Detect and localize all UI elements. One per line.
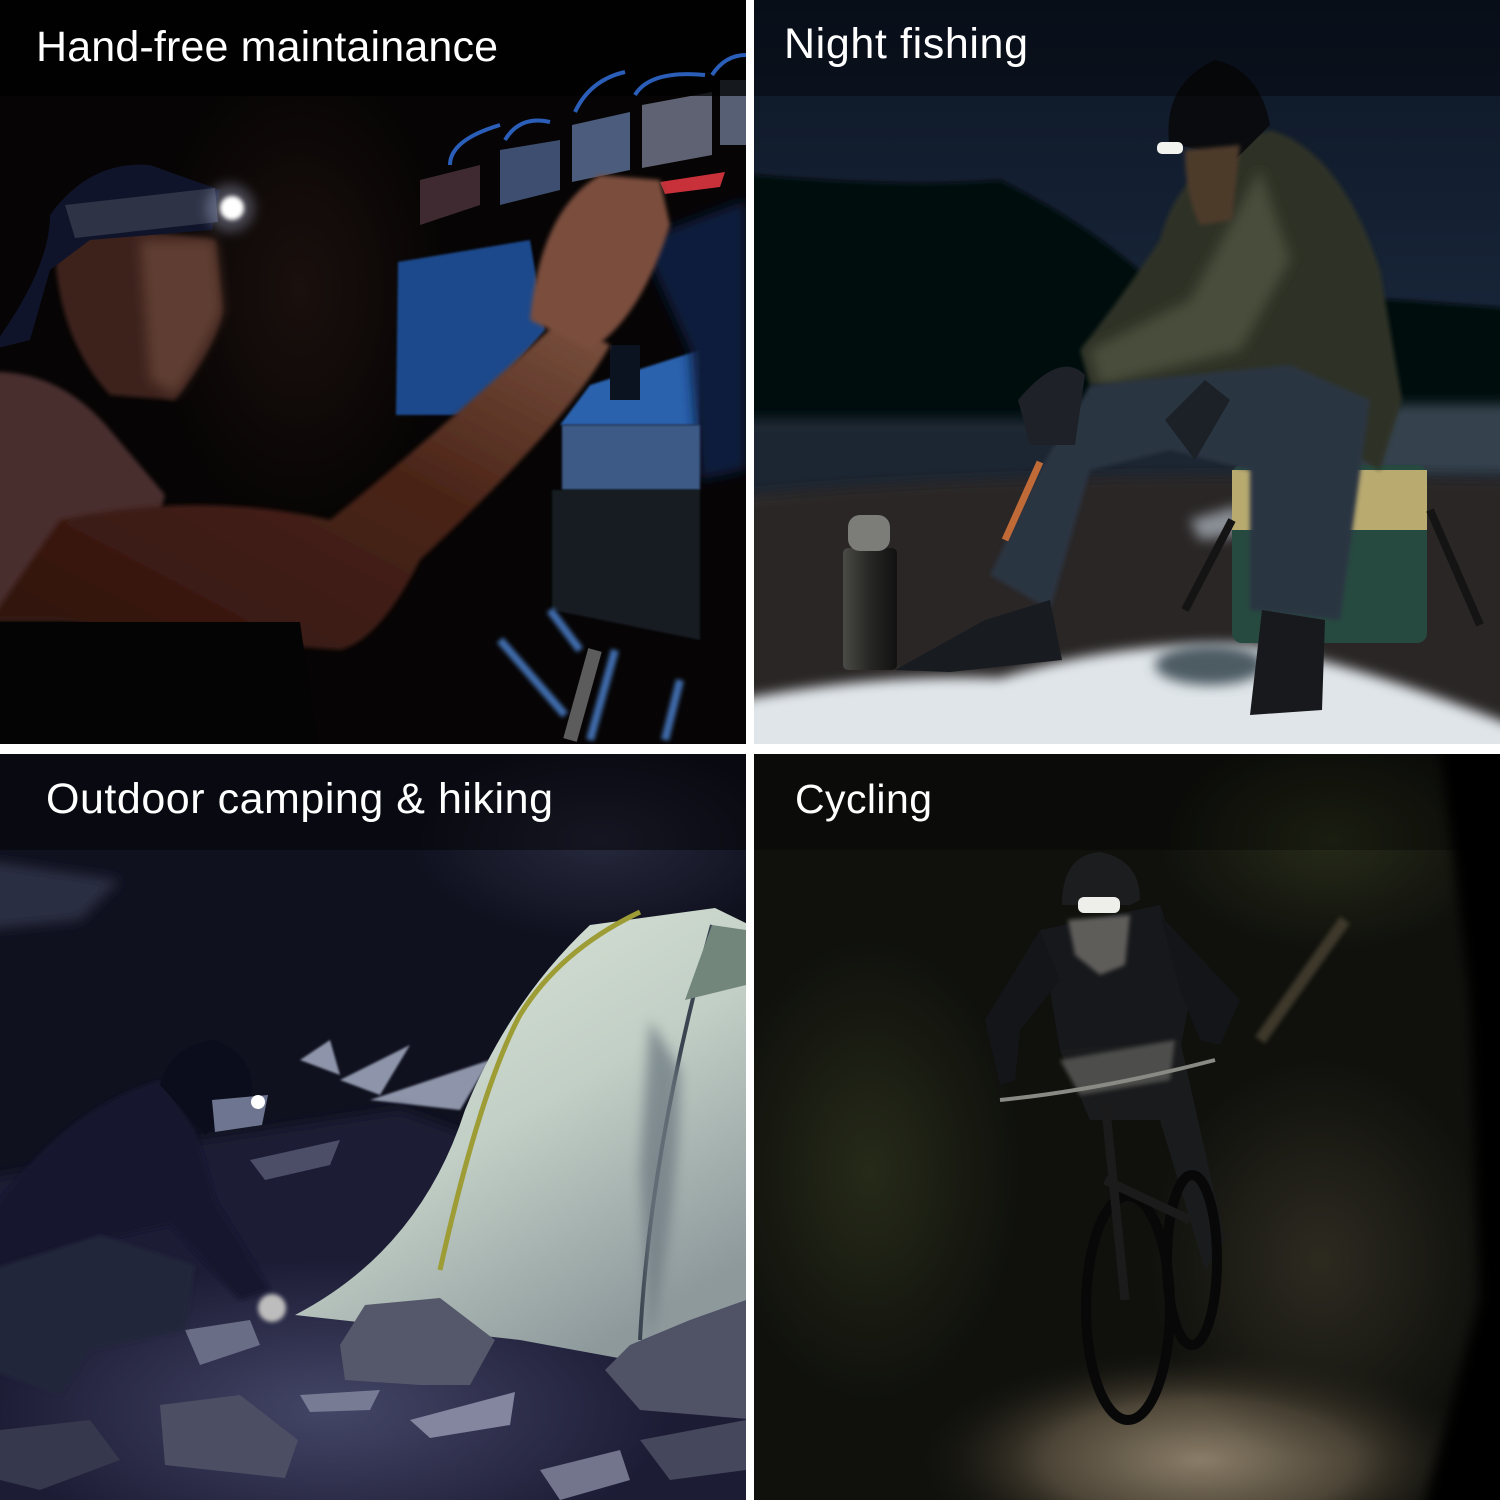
panel: hand-free maintenance xyxy=(0,0,746,760)
header bar xyxy=(0,754,746,850)
panel: night fishing xyxy=(754,0,1500,744)
cyclist xyxy=(985,852,1240,1420)
heading: Hand-free maintainance xyxy=(36,23,498,71)
heading: Night fishing xyxy=(784,20,1028,68)
wires xyxy=(450,55,746,165)
tent xyxy=(295,908,760,1362)
header bar xyxy=(1222,770,1438,850)
tree trunk right xyxy=(1420,740,1500,1500)
hiker xyxy=(0,1081,289,1380)
fisher xyxy=(895,60,1402,715)
thermos xyxy=(843,515,897,670)
header bar xyxy=(754,0,1500,96)
cooler seat xyxy=(1185,465,1480,643)
panel: cycling xyxy=(720,730,1500,1500)
electrical cabinet xyxy=(396,80,746,740)
heading: Cycling xyxy=(795,776,932,822)
header bar xyxy=(690,80,746,96)
bicycle xyxy=(1000,1060,1217,1420)
worker xyxy=(0,165,670,760)
trail xyxy=(960,1366,1434,1500)
panel: outdoor camping and hiking xyxy=(0,740,790,1500)
rocks xyxy=(0,1140,760,1500)
heading: Outdoor camping & hiking xyxy=(46,775,553,823)
snow xyxy=(754,634,1500,744)
